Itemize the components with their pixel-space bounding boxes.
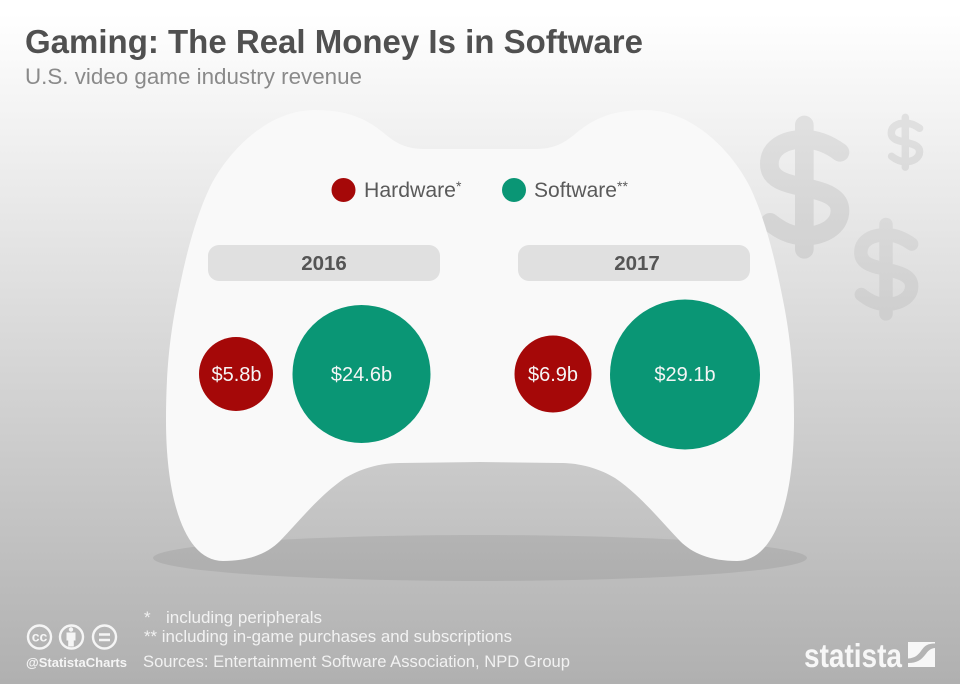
footnotes and sources [143, 608, 570, 671]
icon: no derivatives [93, 626, 116, 648]
bubble: hardware 2017: $6.9b [528, 364, 578, 386]
legend: hardware: Hardware [364, 179, 456, 202]
bubble: hardware 2017 [514, 336, 592, 412]
footnotes and sources: Sources: Entertainment Software Association, NPD Group [143, 652, 570, 671]
logo wordmark: statista [804, 637, 903, 674]
year label 2017: 2017 [614, 252, 660, 275]
footnotes and sources: ** including in-game purchases and subscriptions [144, 627, 512, 646]
bubble: software 2016: $24.6b [331, 364, 392, 386]
legend [332, 178, 628, 202]
subtitle: U.S. video game industry revenue [25, 64, 362, 89]
icon: small dollar sign [891, 117, 920, 167]
icon: large dollar sign [769, 125, 840, 249]
game controller shape [166, 110, 794, 561]
year label 2016: 2016 [301, 252, 347, 275]
logo mark [908, 642, 935, 667]
statista logo [804, 637, 935, 674]
bubble: software 2016 [292, 305, 430, 443]
icon: attribution [60, 626, 83, 648]
bubble: software 2017: $29.1b [654, 364, 716, 386]
footnotes and sources: * [144, 608, 151, 627]
social handle: @StatistaCharts [26, 655, 127, 670]
icon: creative commons badges [28, 626, 116, 648]
title: Gaming: The Real Money Is in Software [25, 23, 643, 60]
bubble: hardware 2016: $5.8b [211, 364, 262, 386]
legend: hardware [332, 178, 462, 202]
legend: hardware: * [456, 178, 462, 194]
year label 2017 [518, 245, 750, 281]
legend: software: ** [617, 178, 628, 194]
bubble: hardware 2016 [199, 337, 273, 411]
legend: software [502, 178, 628, 202]
icon: medium dollar sign [861, 224, 912, 314]
controller shadow [153, 535, 807, 581]
footnotes and sources: including peripherals [166, 608, 322, 627]
bubble: software 2017 [610, 300, 760, 450]
icon: cc: cc [32, 628, 47, 644]
year label 2016 [208, 245, 440, 281]
legend: software: Software [534, 179, 617, 202]
